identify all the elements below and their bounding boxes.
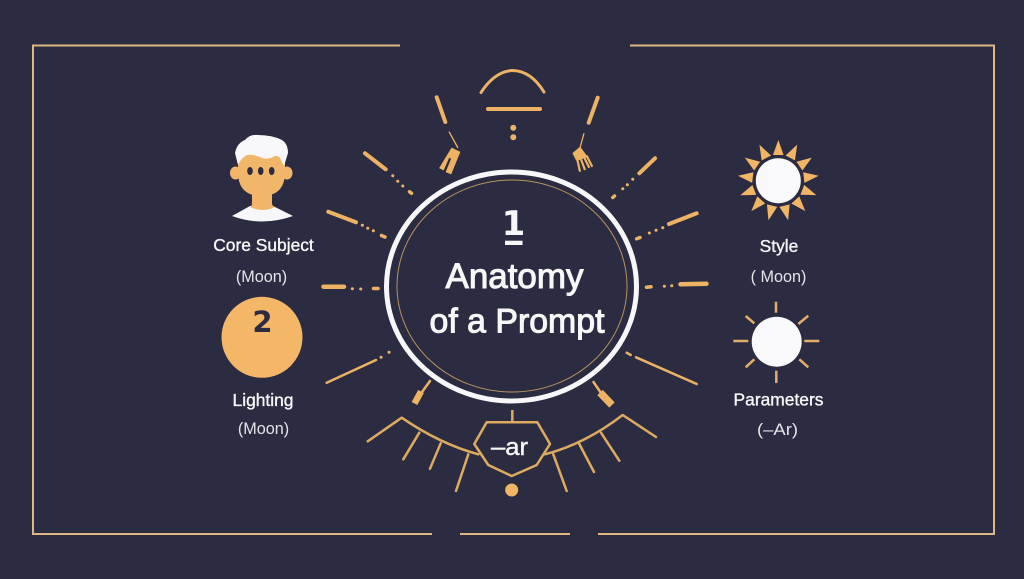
label: core subject: (Moon) (236, 268, 287, 286)
parameter badge: --ar (474, 410, 550, 476)
label: style (751, 236, 806, 286)
title: 1 (502, 204, 525, 244)
label: style: Style (760, 236, 798, 256)
parameter badge: --ar: –ar (491, 434, 528, 461)
icon: lower right ampoule (594, 382, 612, 405)
label: lighting: (Moon) (238, 420, 289, 438)
label: core subject: Core Subject (213, 235, 314, 255)
label: lighting: Lighting (233, 390, 293, 410)
icon: person (230, 135, 293, 222)
icon: parameters sun (733, 302, 819, 383)
label: parameters: (–Ar) (757, 421, 798, 439)
label: parameters: Parameters (734, 390, 824, 410)
bottom wings (368, 415, 656, 491)
icon: lower left ampoule (414, 381, 430, 404)
label: parameters (734, 390, 824, 439)
bottom dot (505, 484, 518, 496)
title (430, 204, 605, 340)
sunburst rays upper (324, 97, 706, 289)
icon: top dome with line and dots (481, 70, 544, 140)
central ring (386, 172, 636, 401)
icon: style sun (737, 140, 819, 221)
lighting badge (222, 297, 302, 378)
title: Anatomy (446, 257, 584, 296)
label: core subject (213, 235, 314, 286)
label: lighting (233, 390, 293, 438)
label: style: ( Moon) (751, 268, 806, 286)
title: of a Prompt (430, 302, 605, 340)
icon: right brush (573, 133, 592, 172)
sunburst rays lower (327, 352, 697, 384)
icon: left fork (440, 132, 460, 174)
lighting badge: 2 (252, 305, 273, 339)
outer frame (33, 46, 994, 534)
